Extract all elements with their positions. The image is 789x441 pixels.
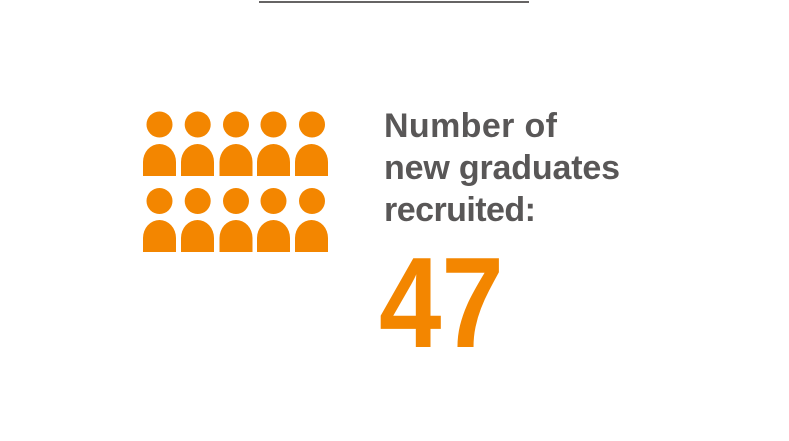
big number: 47: 47 [379, 231, 504, 375]
heading: number of new graduates recruited: recruited: [384, 191, 536, 229]
icon: person row 2 column 1 [143, 188, 176, 252]
heading: number of new graduates recruited [384, 107, 620, 229]
icon: person row 2 column 3 [220, 188, 252, 252]
icon: person row 2 column 4 [257, 188, 290, 252]
icon: grid of ten people [143, 112, 328, 252]
icon: person row 1 column 4 [257, 112, 290, 176]
icon: person row 1 column 3 [220, 112, 252, 176]
heading: number of new graduates recruited: new graduates [384, 149, 620, 187]
icon: person row 1 column 2 [181, 112, 214, 176]
icon: person row 1 column 5 [295, 112, 328, 176]
icon: person row 1 column 1 [143, 112, 176, 176]
heading: number of new graduates recruited: Number of [384, 107, 558, 145]
icon: person row 2 column 5 [295, 188, 328, 252]
icon: person row 2 column 2 [181, 188, 214, 252]
